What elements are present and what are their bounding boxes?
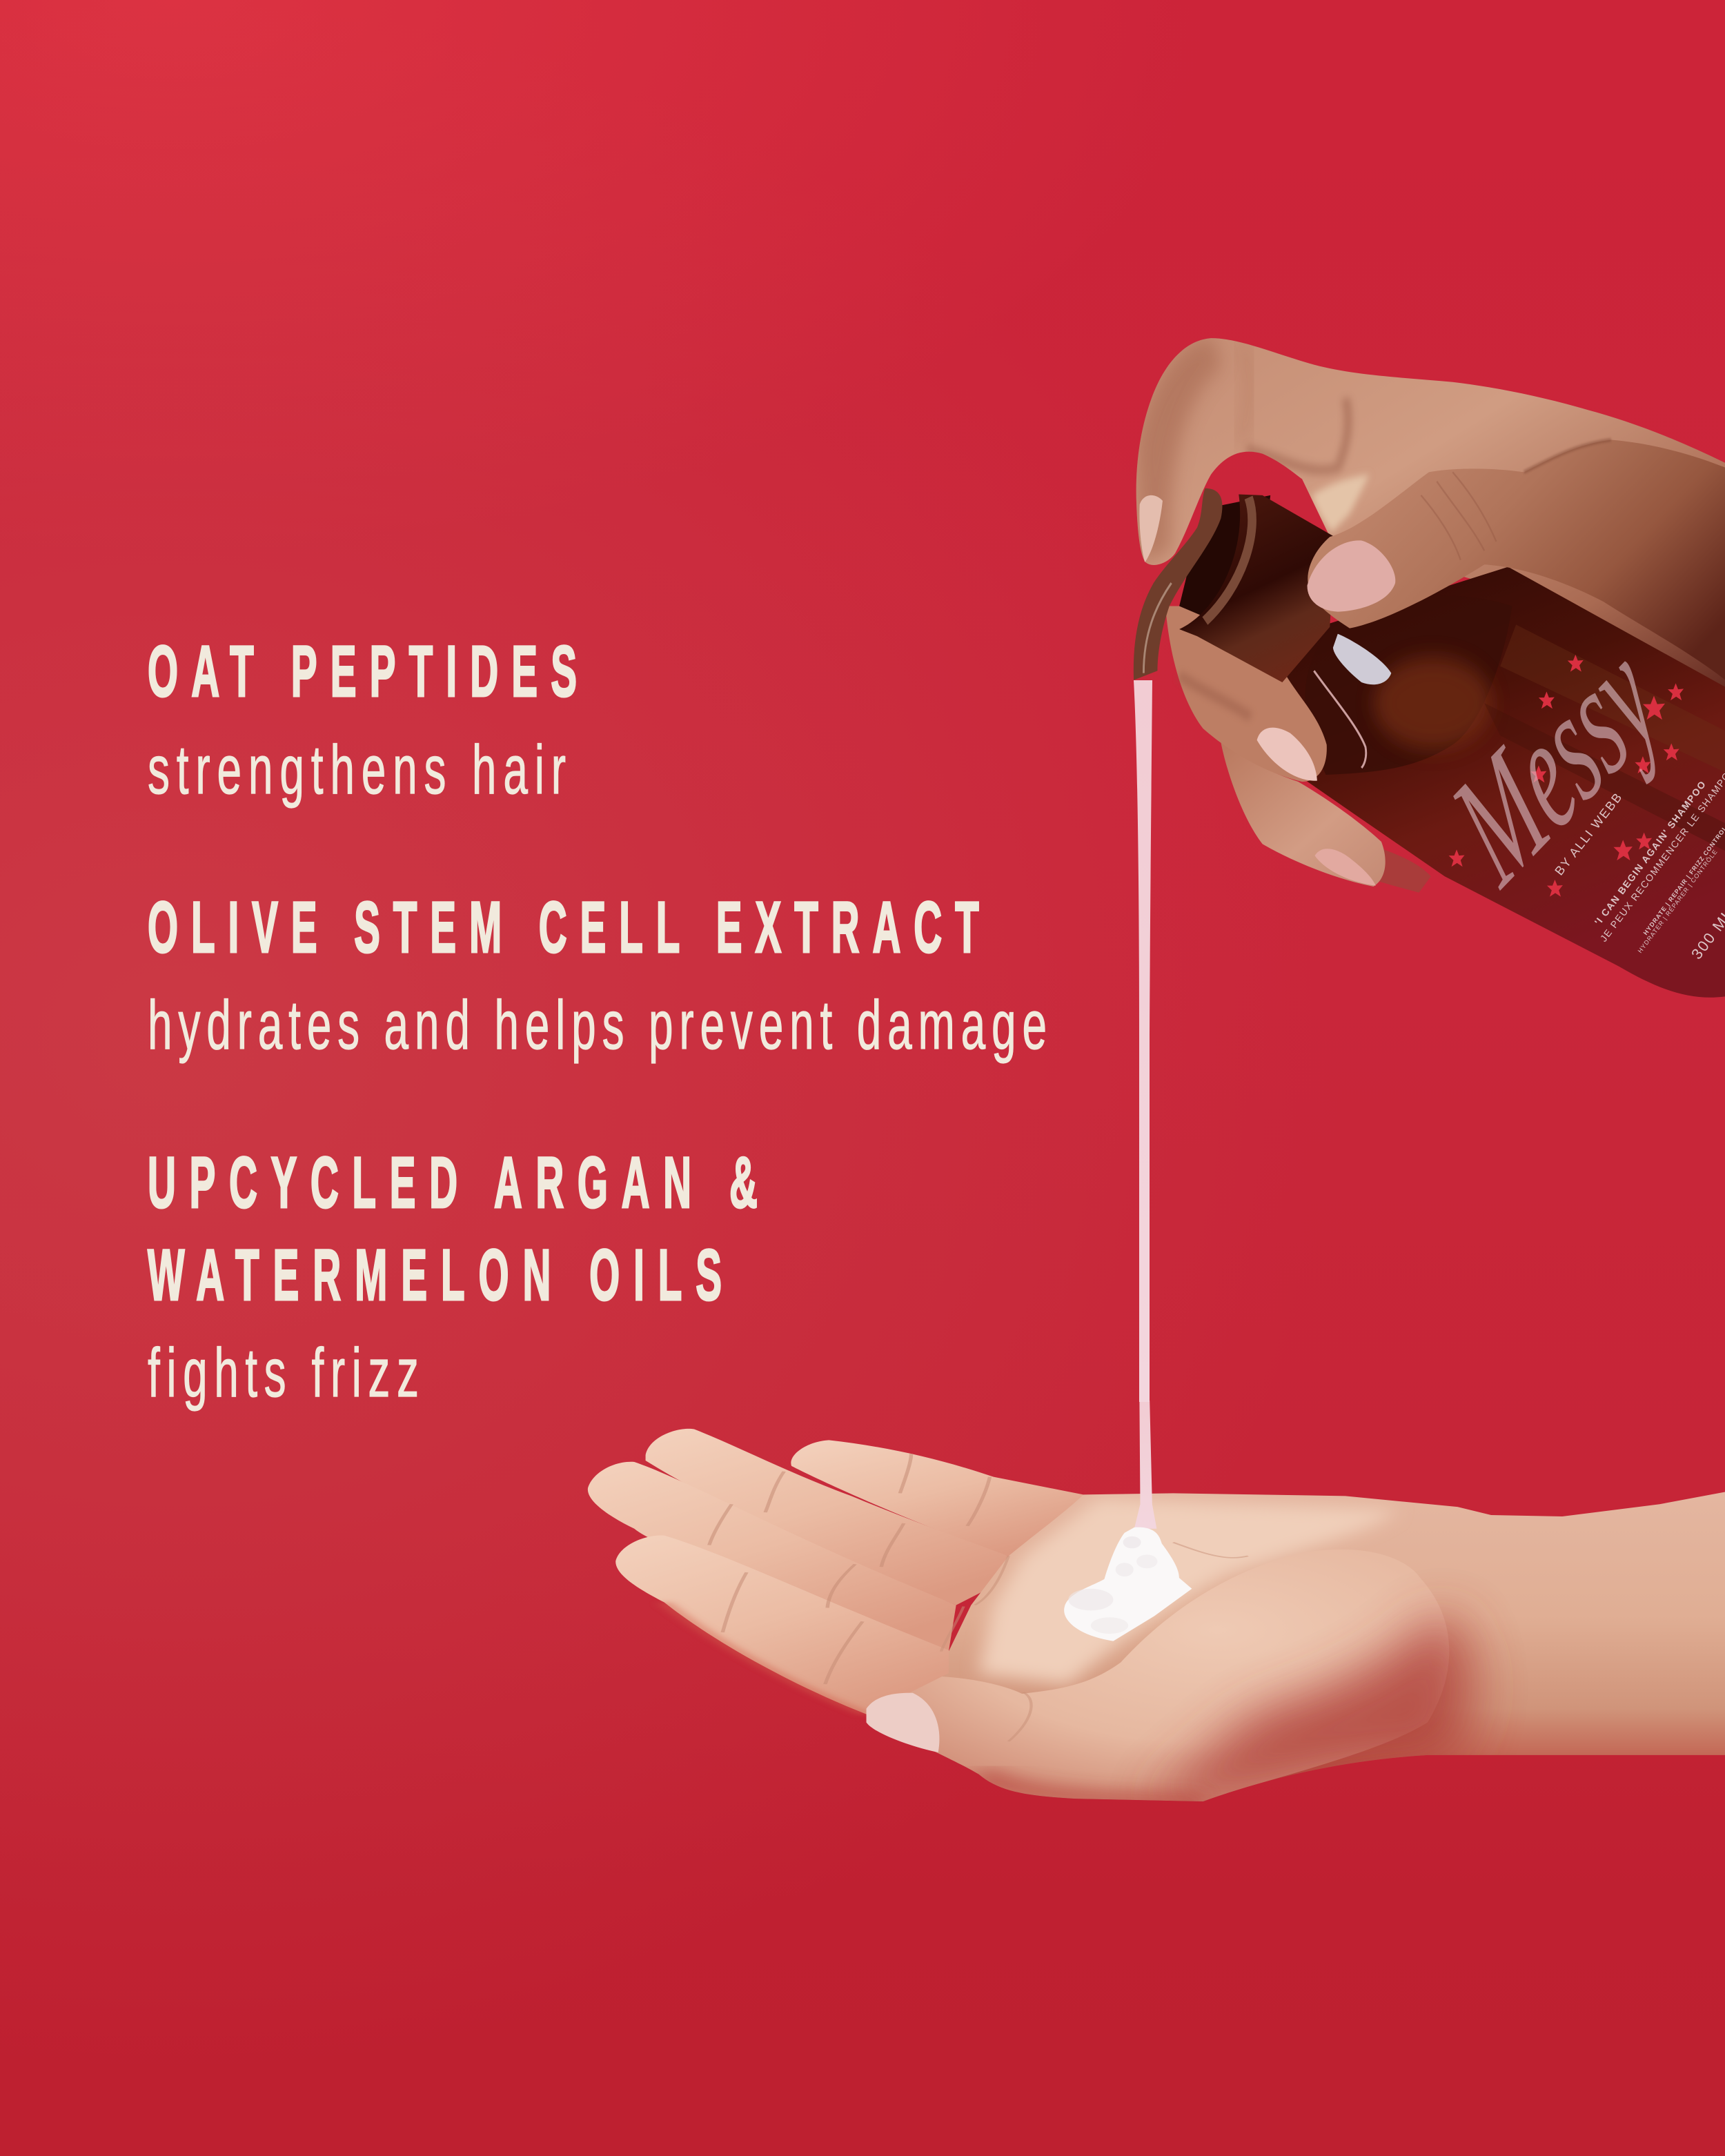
bottle highlight [1333,634,1391,684]
bottle and upper hand [1134,336,1725,998]
pump neck [1179,495,1270,624]
bottle shoulder shadow [1305,596,1512,775]
ring finger tip shadow [1377,849,1431,893]
bottle reflection strip [1500,624,1725,773]
description: hydrates and helps prevent damage: hydrates and helps prevent damage [148,986,1047,1063]
heading: olive stem cell extract: OLIVE STEM CELL EXTRACT [148,887,979,967]
thumbnail [1308,540,1395,612]
bottle dark band [1484,703,1725,851]
arm lower blush [1472,1732,1725,1773]
finger four lower edge blush [664,1603,867,1714]
description: strengthens hair: strengthens hair [148,731,566,808]
diagonal hand shadow [1151,1608,1472,1807]
bottle stars [1449,655,1684,897]
thumbnail [867,1693,939,1752]
finger three [588,1462,956,1652]
thumb [1308,439,1725,680]
thumb base blush [978,1774,1203,1801]
product name: 'I CAN BEGIN AGAIN' SHAMPOO [1593,778,1708,927]
collar ring [1205,497,1252,621]
palm shadow beneath finger [1247,398,1348,470]
ring finger [1221,742,1386,887]
finger two [646,1429,1009,1605]
heading: oat peptides: OAT PEPTIDES [148,631,577,711]
palm centre highlight [978,1499,1398,1684]
hand back and index finger [1136,338,1725,703]
finger four [615,1536,960,1714]
description: fights frizz: fights frizz [148,1334,419,1411]
thumb web crease [1524,439,1611,472]
thumb mound [870,1550,1449,1801]
upper stream section [1134,680,1152,1402]
palm and wrist [867,1492,1725,1801]
bottle body [1282,567,1725,998]
light patch under index finger [1312,475,1370,532]
index fingernail [1139,495,1163,562]
finger left shade [1136,336,1223,564]
heading line two: watermelon oils: WATERMELON OILS [148,1234,722,1315]
hand shading [1136,336,1370,564]
pump spout [1134,488,1222,680]
french benefits: HYDRATER | RÉPARER | CONTRÔLE [1637,848,1719,954]
thumb knuckle creases [1421,472,1496,560]
shampoo blob [1064,1527,1192,1641]
collar [1179,495,1334,682]
heading: upcycled argan and watermelon oils: UPCYCLED ARGAN & [148,1142,758,1223]
bottle amber glow [1373,657,1492,749]
ingredient text block [148,631,1047,1411]
lower open hand with shampoo [588,1401,1725,1807]
palm and thumb creases [941,1543,1248,1741]
bottle label text [1426,604,1725,962]
shampoo stream [1134,1401,1156,1529]
shoulder edge highlight [1314,671,1366,768]
ring fingernail [1314,849,1376,886]
finger one [791,1440,1083,1556]
dark area behind bottle [1259,480,1326,537]
middle finger [1165,606,1327,782]
finger bend crease [1239,343,1250,444]
by line: BY ALLI WEBB [1552,790,1625,878]
middle finger knuckle shade [1179,675,1250,717]
palm shading [870,1499,1725,1807]
middle fingernail [1257,728,1317,781]
finger creases [709,1454,989,1684]
spout highlight [1143,583,1172,673]
